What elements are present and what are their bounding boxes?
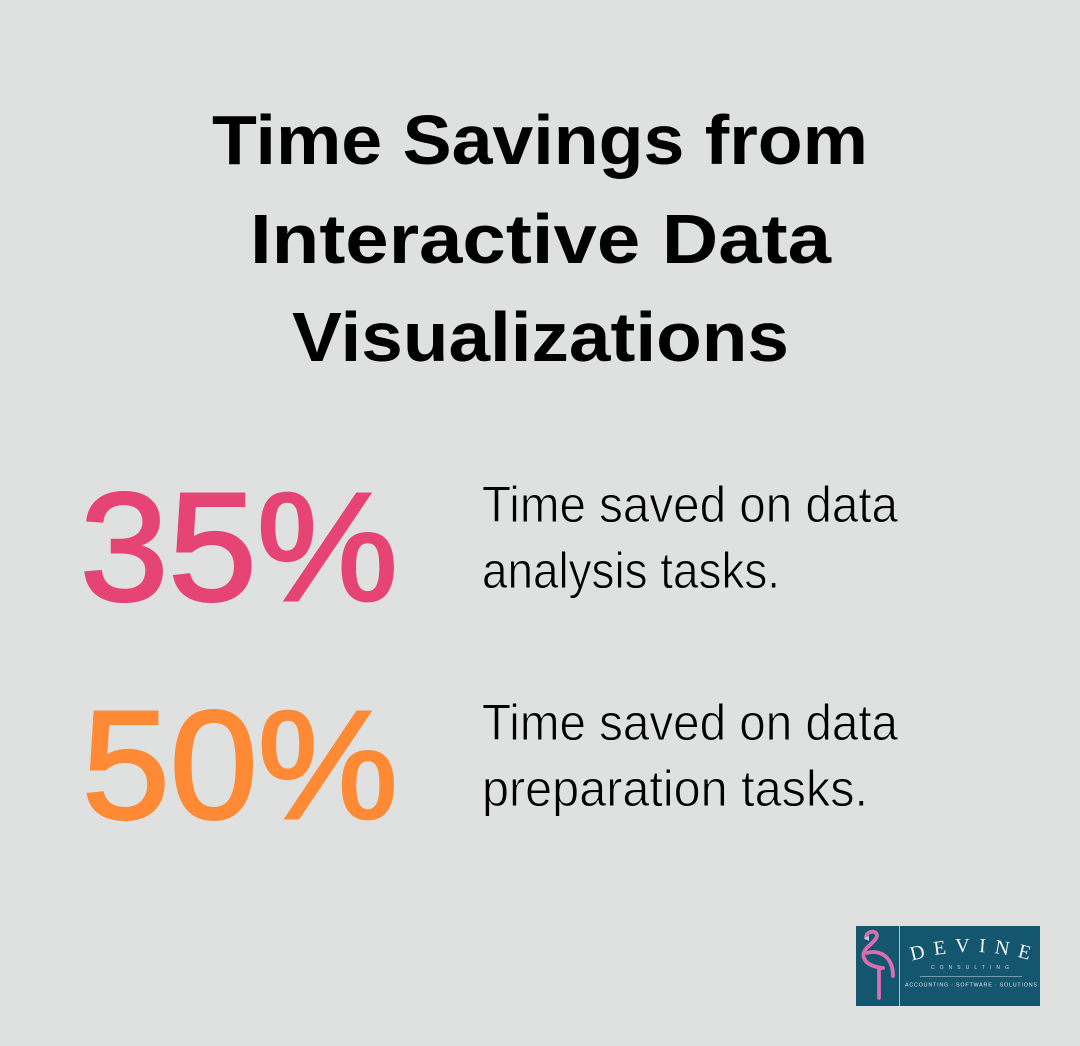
logo wordmark: DEVINE <box>909 938 1030 960</box>
stat number: 50%: 50% <box>82 679 398 851</box>
stat description: preparation: Time saved on data <box>482 694 899 751</box>
logo wordmark <box>905 938 1037 988</box>
stat description: preparation: preparation tasks. <box>482 760 868 817</box>
stat number: 35%: 35% <box>80 461 398 633</box>
logo: Devine Consulting <box>856 926 1040 1006</box>
title: Interactive Data <box>250 200 832 278</box>
logo wordmark: CONSULTING <box>931 965 1009 971</box>
stat description: preparation <box>482 694 899 817</box>
stat description: analysis: analysis tasks. <box>482 542 780 599</box>
title: Visualizations <box>292 298 789 376</box>
title <box>212 101 868 376</box>
logo wordmark: ACCOUNTING · SOFTWARE · SOLUTIONS <box>905 982 1037 988</box>
stat: 50% time saved on data preparation <box>82 679 899 851</box>
icon: flamingo <box>863 932 893 998</box>
stat description: analysis <box>482 476 899 599</box>
stat description: analysis: Time saved on data <box>482 476 899 533</box>
stat: 35% time saved on data analysis <box>80 461 899 633</box>
title: Time Savings from <box>212 101 868 179</box>
